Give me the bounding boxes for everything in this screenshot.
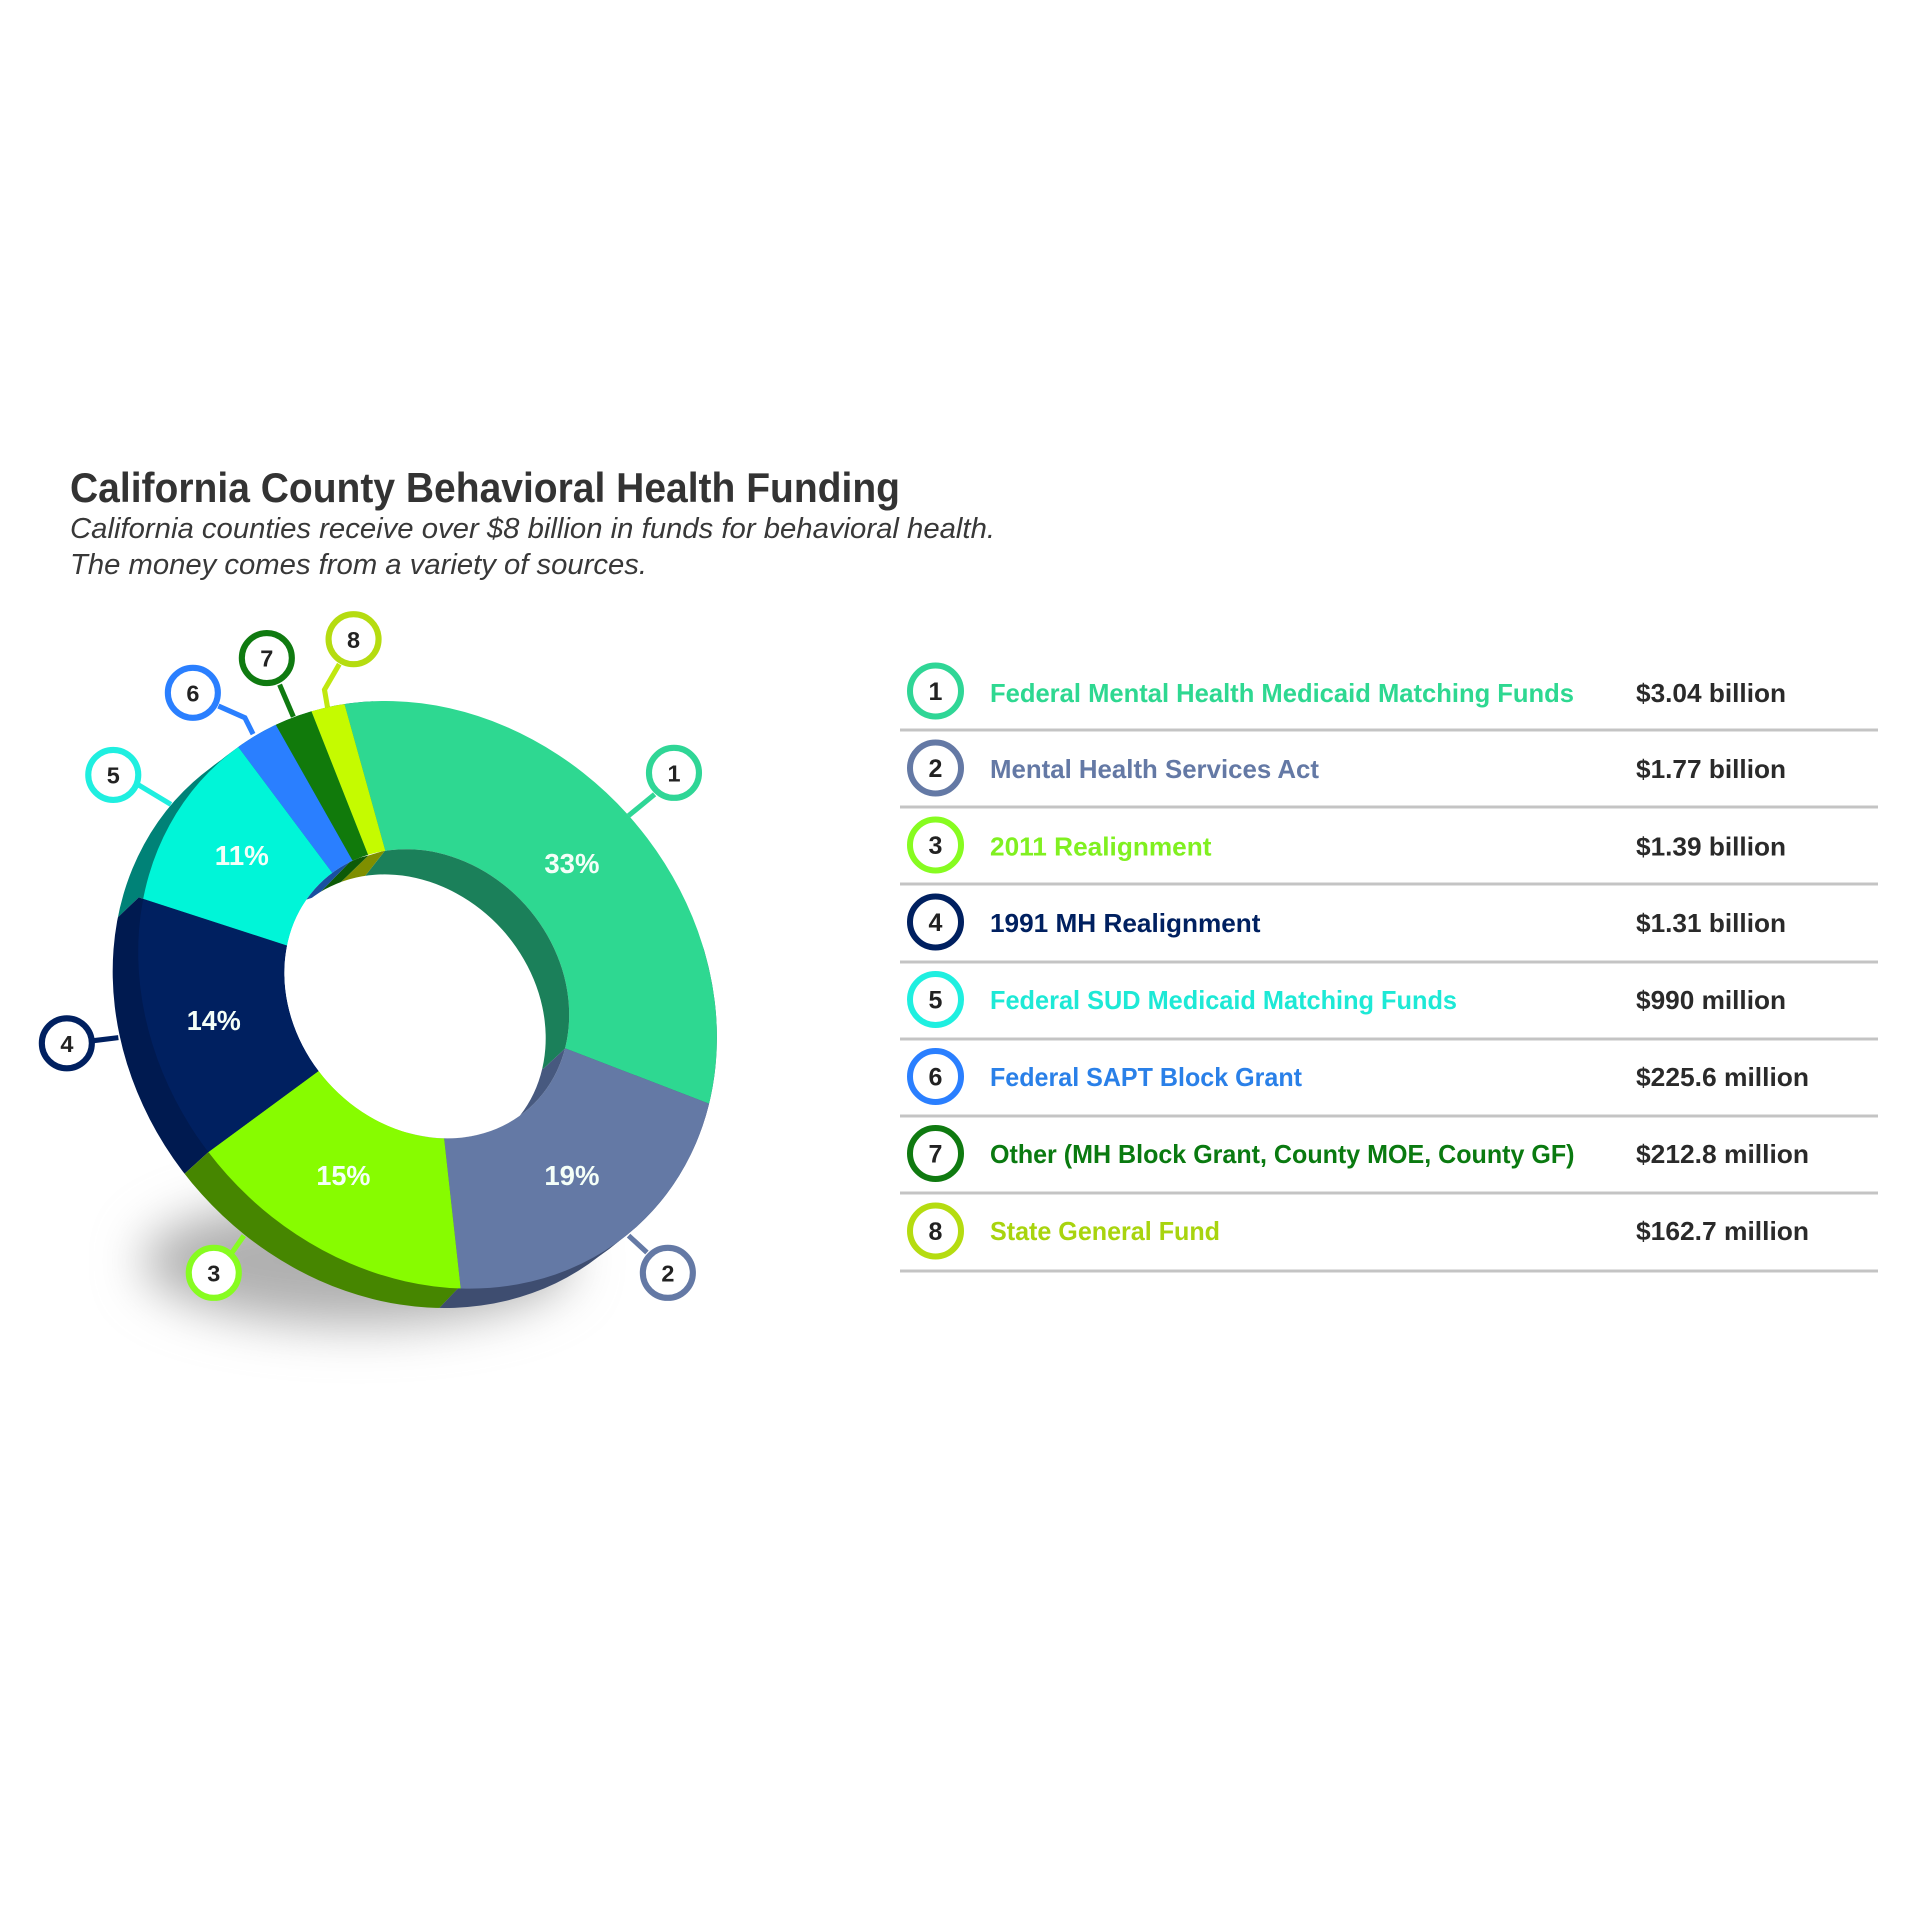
row 6: 6 <box>929 1064 942 1092</box>
row 1: $3.04 billion <box>1636 678 1786 708</box>
row 4 <box>910 896 1786 948</box>
callout numbers: 8 <box>347 627 360 653</box>
slice 7 <box>276 711 368 861</box>
percentage labels <box>187 840 599 1191</box>
slice 8 <box>312 704 386 855</box>
row 6: $225.6 million <box>1636 1062 1809 1092</box>
row 3: 3 <box>929 832 942 860</box>
numbered callouts <box>42 614 699 1298</box>
callout numbers: 4 <box>60 1031 73 1057</box>
row 6: Federal SAPT Block Grant <box>990 1062 1302 1092</box>
row 2: Mental Health Services Act <box>990 754 1319 784</box>
row 3: $1.39 billion <box>1636 832 1786 862</box>
row 4: 1991 MH Realignment <box>990 908 1261 938</box>
percentage labels: 33% <box>544 848 599 879</box>
row 1: 1 <box>929 678 943 706</box>
row 2 <box>910 742 1786 794</box>
slice 1: 33% <box>344 701 717 1104</box>
row 8 <box>910 1206 1809 1256</box>
row 2: 2 <box>929 755 942 783</box>
row 3 <box>910 820 1786 870</box>
row 5: $990 million <box>1636 985 1786 1015</box>
slice 3: 15% <box>208 1071 461 1288</box>
callout numbers: 7 <box>260 646 273 672</box>
funding legend table <box>900 666 1878 1271</box>
row 7: 7 <box>929 1140 942 1168</box>
row 7: $212.8 million <box>1636 1139 1809 1169</box>
row 5: Federal SUD Medicaid Matching Funds <box>990 985 1457 1015</box>
row 8: 8 <box>929 1218 943 1246</box>
slice 4: 14% <box>138 898 318 1152</box>
row 4: $1.31 billion <box>1636 908 1786 938</box>
leader lines <box>93 664 655 1252</box>
donut chart <box>38 611 717 1354</box>
subtitle: California counties receive over $8 billion in funds for behavioral health. <box>70 513 995 545</box>
callout numbers <box>60 627 680 1287</box>
row 8: State General Fund <box>990 1216 1220 1246</box>
row 7 <box>910 1128 1809 1179</box>
callout numbers: 5 <box>107 763 120 789</box>
title: California County Behavioral Health Funding <box>70 464 900 511</box>
drop shadow <box>143 1197 571 1325</box>
row 3: 2011 Realignment <box>990 832 1212 862</box>
row 5: 5 <box>929 986 943 1014</box>
row 2: $1.77 billion <box>1636 754 1786 784</box>
donut hole with inner wall <box>284 849 570 1138</box>
callout numbers: 3 <box>207 1261 220 1287</box>
row 1 <box>910 666 1786 716</box>
callout numbers: 2 <box>661 1261 674 1287</box>
callout numbers: 6 <box>186 680 199 706</box>
slice 2: 19% <box>444 1048 709 1289</box>
row 6 <box>910 1051 1809 1102</box>
row 1: Federal Mental Health Medicaid Matching Funds <box>990 678 1574 708</box>
slice 5: 11% <box>143 747 332 946</box>
row 8: $162.7 million <box>1636 1216 1809 1246</box>
row 5 <box>910 974 1786 1025</box>
subtitle: The money comes from a variety of sources. <box>70 549 647 581</box>
donut side walls <box>112 701 717 1308</box>
percentage labels: 11% <box>215 840 269 871</box>
donut top face slices <box>138 701 717 1289</box>
slice 6 <box>238 724 352 873</box>
subtitle <box>70 513 995 581</box>
row dividers <box>900 730 1878 1271</box>
row 4: 4 <box>929 909 943 937</box>
percentage labels: 19% <box>544 1160 599 1191</box>
percentage labels: 15% <box>316 1160 370 1191</box>
callout numbers: 1 <box>667 761 680 787</box>
percentage labels: 14% <box>187 1005 241 1036</box>
row 7: Other (MH Block Grant, County MOE, County GF) <box>990 1139 1574 1169</box>
